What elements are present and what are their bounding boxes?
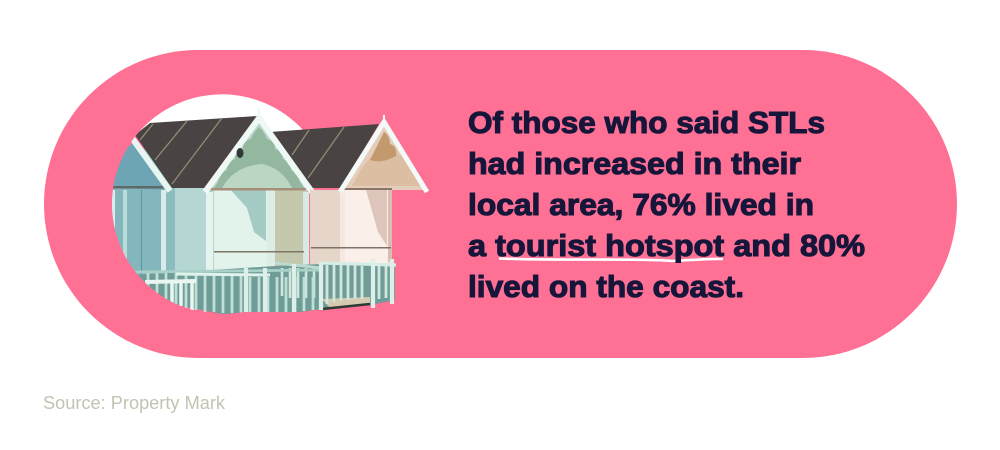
body text: had increased in their (468, 146, 801, 181)
white circle backdrop (139, 94, 303, 150)
body text: lived on the coast. (468, 269, 744, 304)
fence and decking (135, 259, 396, 314)
body text: a tourist hotspot and 80% (468, 228, 865, 263)
image: beach huts in white circle (112, 94, 428, 314)
highlight underline (499, 258, 723, 261)
hut 2 bargeboard (205, 118, 312, 192)
hut 3: pink (310, 190, 392, 268)
body text: local area, 76% lived in (468, 187, 814, 222)
roof second hut (270, 124, 379, 188)
panel: pink pill background (44, 50, 957, 358)
source note: Source: Property Mark (43, 393, 226, 413)
roof left hut (135, 116, 257, 188)
hut 3 bargeboard (340, 122, 427, 192)
hut 2: mint (206, 116, 307, 275)
body text (468, 105, 865, 304)
hut 1: blue (112, 116, 257, 280)
body text: Of those who said STLs (468, 105, 825, 140)
